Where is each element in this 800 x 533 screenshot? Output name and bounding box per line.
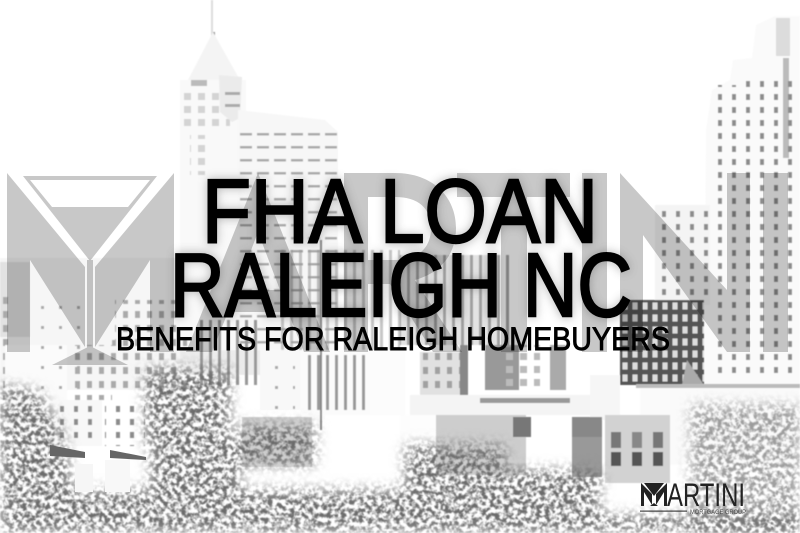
white signboards among trees [50,445,146,492]
watermark letter T [457,173,570,352]
lighter treetops on the right [690,405,800,533]
watermark letter M with martini glass [7,173,174,365]
logo wordmark: ARTINI [667,477,745,513]
small Martini Mortgage Group logo [640,477,746,516]
title [170,162,632,336]
tree canopy [0,368,800,533]
watermark letter R [344,173,462,352]
watermark letter A [186,173,330,352]
right tower [717,18,793,374]
downtown low-rise buildings [0,240,800,485]
watermark: MARTINI logo [7,173,788,365]
watermark letter I [582,173,607,352]
logo martini glass M [641,483,667,506]
watermark letter N [620,173,750,352]
watermark final letter I [763,173,788,352]
title glow: FHA LOAN [202,161,598,263]
left tower with spire [180,0,338,352]
logo tagline: MORTGAGE GROUP [690,509,746,516]
subtitle: BENEFITS FOR RALEIGH HOMEBUYERS [116,321,670,357]
mid-rise block behind the lettering [620,205,710,385]
title glow: RALEIGH NC [170,235,632,337]
title line two: RALEIGH NC [170,236,632,336]
title glow [170,161,632,337]
logo rule [640,511,687,512]
title line one: FHA LOAN [202,162,598,262]
